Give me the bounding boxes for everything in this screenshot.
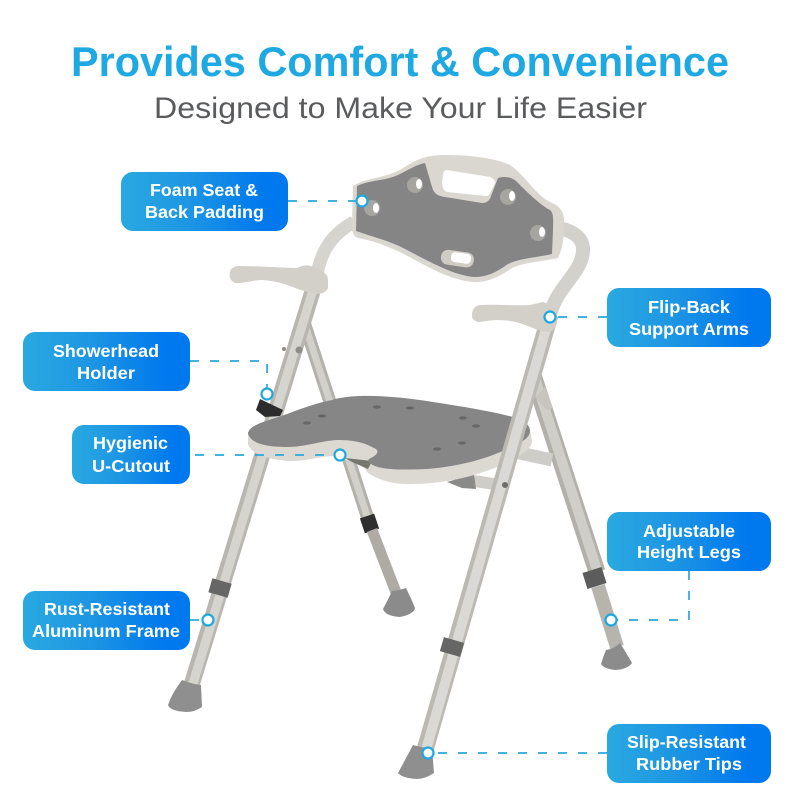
right frame upper curve [551,228,583,312]
callout: foam seat and back padding: Back Padding [145,202,264,222]
right arm rest [472,302,557,332]
seat [248,396,532,484]
leader: rubber tips [422,748,607,758]
backrest [352,155,564,282]
leader: u-cutout [195,450,346,460]
side pivot bolts [282,346,302,354]
right front leg [398,315,550,779]
cross bars [447,452,552,489]
callout: hygienic u-cutout: Hygienic [93,433,168,453]
callout: flip-back support arms [607,288,771,347]
rear right leg [533,375,632,670]
leader: height legs [606,571,689,626]
leader: aluminum frame [190,614,214,626]
rear left leg [304,322,415,617]
title: Provides Comfort & Convenience [71,38,729,85]
backrest handle slot [442,170,495,196]
callout: slip-resistant rubber tips: Slip-Resistant [627,732,746,752]
backrest lower slot [440,249,475,268]
callout: foam seat and back padding: Foam Seat & [150,180,258,200]
callout: rust-resistant aluminum frame: Aluminum Frame [32,621,180,641]
left arm rest [230,265,328,294]
seat drain holes [303,405,480,451]
leader: showerhead holder [190,361,272,400]
callout: showerhead holder [23,332,190,391]
callout: hygienic u-cutout: U-Cutout [92,456,170,476]
callout: showerhead holder: Holder [77,363,135,383]
callout: rust-resistant aluminum frame [23,591,190,650]
callout: flip-back support arms: Flip-Back [648,297,730,317]
callout: adjustable height legs: Adjustable [643,521,735,541]
callout: showerhead holder: Showerhead [53,341,159,361]
callout: hygienic u-cutout [72,425,190,484]
callout: slip-resistant rubber tips [607,724,771,783]
callout: adjustable height legs: Height Legs [637,542,741,562]
left front leg [168,280,316,712]
callout: adjustable height legs [607,512,771,571]
callout: foam seat and back padding [121,172,288,231]
backrest holes [364,177,546,241]
showerhead holder clip [256,399,283,417]
callout: slip-resistant rubber tips: Rubber Tips [636,754,742,774]
leader: support arms [544,312,607,322]
callout: flip-back support arms: Support Arms [629,319,749,339]
left frame upper curve [316,222,354,284]
subtitle: Designed to Make Your Life Easier [154,92,647,125]
shower chair illustration [168,155,632,779]
leader: foam padding [288,196,368,206]
callout: rust-resistant aluminum frame: Rust-Resistant [44,599,170,619]
